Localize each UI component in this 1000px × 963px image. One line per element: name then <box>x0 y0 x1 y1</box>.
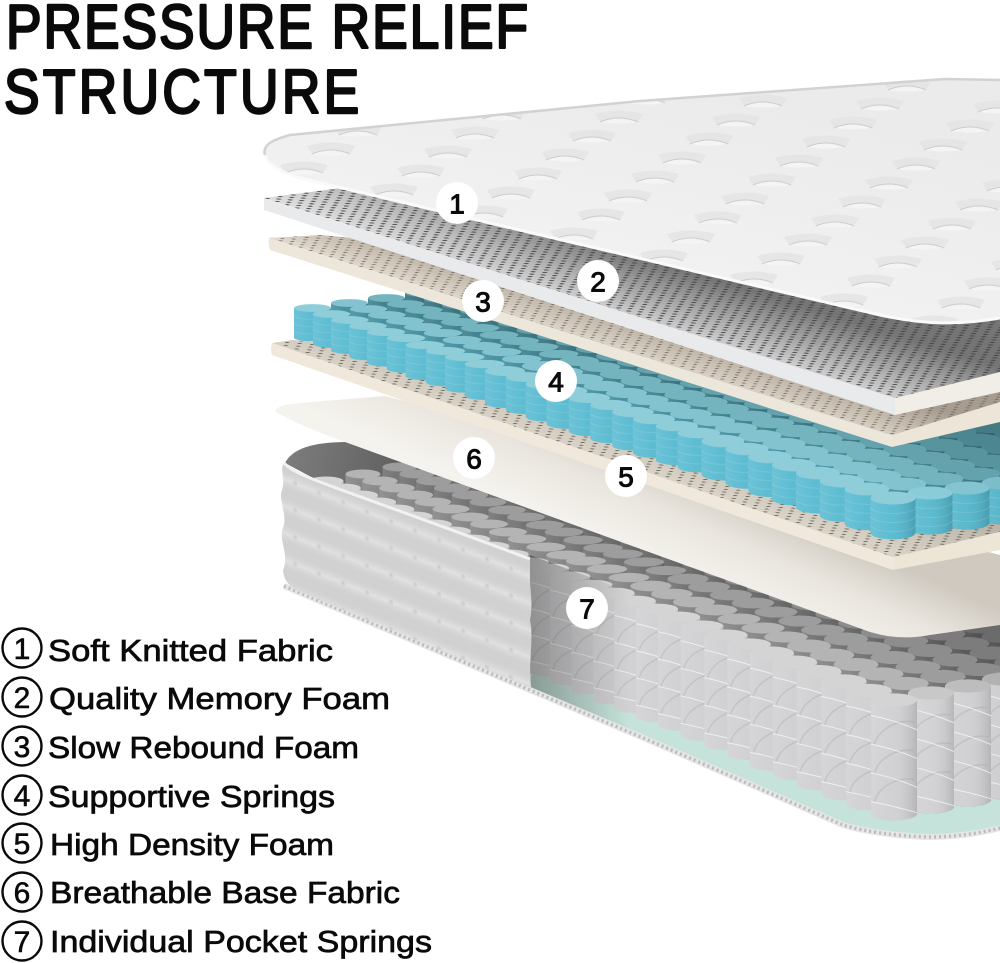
legend item 6: Breathable Base Fabric <box>50 875 400 910</box>
callout 1 <box>436 182 478 224</box>
title <box>4 0 528 127</box>
callout 2: 2 <box>590 266 606 298</box>
layer 6: breathable base fabric <box>276 396 1000 637</box>
callout 3 <box>462 280 504 322</box>
callout 5: 5 <box>618 462 634 492</box>
callout 2 <box>577 260 619 302</box>
callout 7: 7 <box>579 594 595 624</box>
layer 4: supportive blue springs <box>294 269 1000 539</box>
layer 2: quality memory foam <box>264 187 1000 415</box>
callout 1: 1 <box>449 188 465 220</box>
legend item 3: 3 <box>14 731 30 764</box>
legend item 1 <box>2 628 333 668</box>
callout 5 <box>605 455 647 497</box>
callout 4 <box>535 360 577 402</box>
layer 1: soft knitted fabric <box>264 79 1000 323</box>
legend item 4: 4 <box>14 780 30 813</box>
legend item 1: Soft Knitted Fabric <box>48 633 333 668</box>
legend <box>2 628 432 960</box>
dark inner wall <box>285 442 430 495</box>
legend item 5: High Density Foam <box>50 827 334 862</box>
title: STRUCTURE <box>4 58 359 127</box>
legend item 2: Quality Memory Foam <box>49 681 390 716</box>
callout 6: 6 <box>466 444 482 474</box>
quilted side panel <box>281 463 531 688</box>
legend item 3: Slow Rebound Foam <box>48 730 359 765</box>
legend item 5: 5 <box>14 828 30 861</box>
legend item 7: Individual Pocket Springs <box>50 924 432 959</box>
layer 3: slow rebound foam <box>269 235 1000 447</box>
shade on the cut-away springs <box>530 555 630 735</box>
legend item 4: Supportive Springs <box>48 779 335 814</box>
callout 3: 3 <box>475 286 491 318</box>
layer 5: high density foam <box>271 340 1000 570</box>
mint base board <box>531 675 1000 837</box>
callout 7 <box>566 587 608 629</box>
legend item 2: 2 <box>14 682 30 715</box>
legend item 7: 7 <box>14 926 30 959</box>
legend item 6: 6 <box>14 877 30 910</box>
layer 7: individual pocket springs block <box>281 428 1000 837</box>
callout 6 <box>453 437 495 479</box>
legend item 1: 1 <box>14 633 30 666</box>
piped edge <box>284 586 1000 837</box>
callout 4: 4 <box>548 366 564 398</box>
pocket spring rows <box>308 428 1000 820</box>
